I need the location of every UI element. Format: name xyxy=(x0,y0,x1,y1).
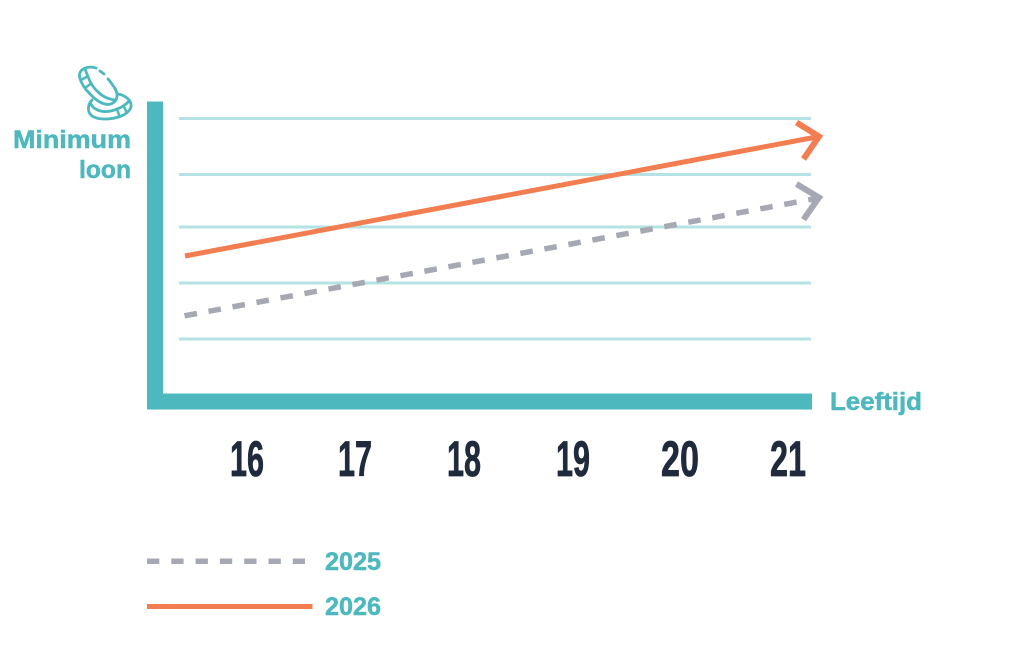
age numbers: 21 xyxy=(770,431,806,487)
age numbers: 17 xyxy=(338,431,372,487)
age numbers: 19 xyxy=(556,431,590,487)
icon: coins xyxy=(79,67,131,119)
y axis label: loon xyxy=(79,156,131,184)
legend item: 2026: 2026 xyxy=(325,593,381,621)
age numbers: 20 xyxy=(661,431,699,487)
legend item: 2025: 2025 xyxy=(325,548,381,576)
y axis label xyxy=(13,126,131,184)
line 2025 with arrow xyxy=(184,184,819,316)
age numbers: 18 xyxy=(447,431,481,487)
age numbers: 16 xyxy=(230,431,264,487)
age numbers xyxy=(230,431,806,487)
y axis label: Minimum xyxy=(13,126,131,154)
legend xyxy=(147,548,381,621)
x axis label: Leeftijd xyxy=(830,388,922,416)
axes xyxy=(147,102,812,410)
line 2026 with arrow xyxy=(185,122,819,256)
